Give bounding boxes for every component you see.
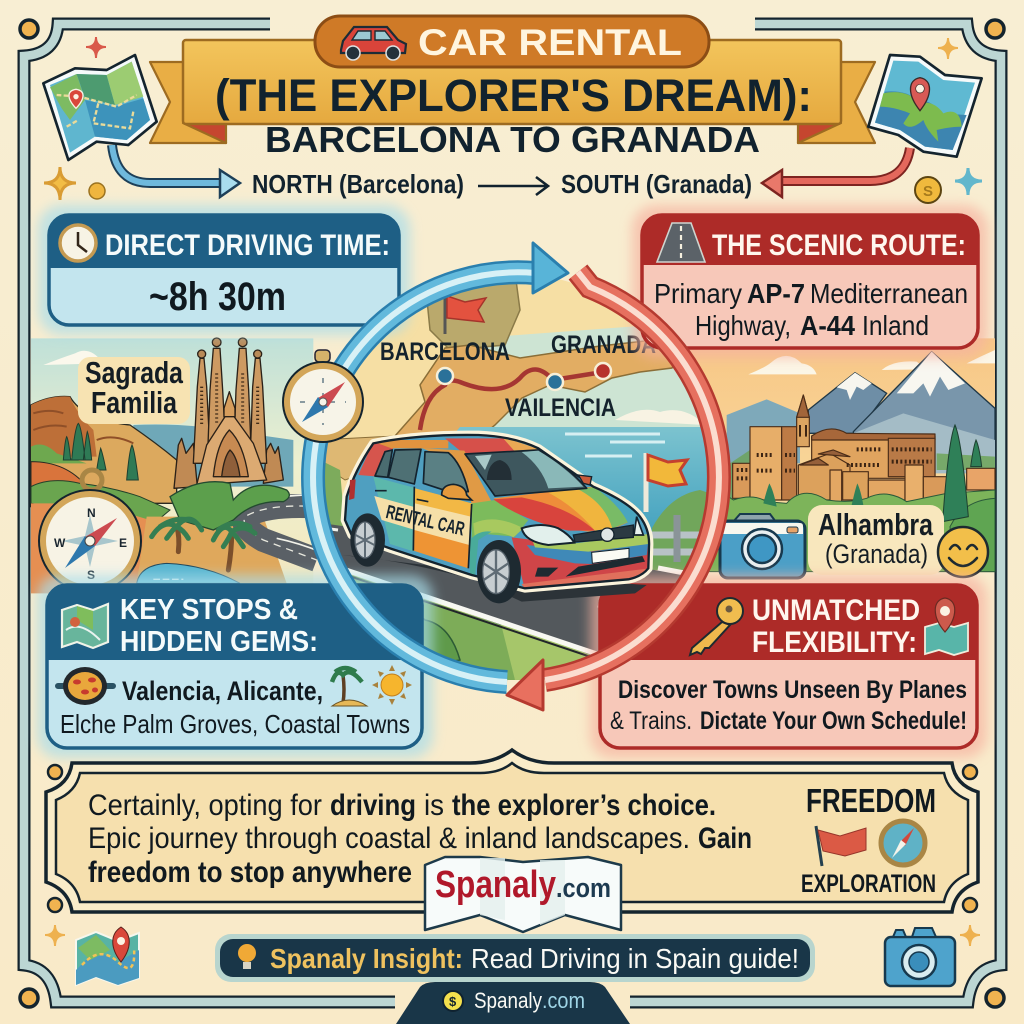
icon: large compass: W: [54, 536, 66, 550]
freedom label: FREEDOM: [806, 782, 936, 819]
icon: bottom right camera: [885, 928, 955, 986]
icon: palm island: [332, 668, 367, 706]
exploration label: EXPLORATION: [801, 870, 936, 898]
panel: unmatched flexibility: [590, 575, 987, 758]
icon: compass: [881, 821, 925, 865]
summary text: the explorer’s choice.: [452, 789, 716, 822]
icon: red car: [341, 27, 406, 60]
label: Sagrada Familia: Sagrada: [85, 355, 184, 390]
panel header: [600, 585, 977, 660]
icon: open book logo: [425, 857, 621, 932]
body text: AP-7: [747, 278, 805, 309]
insight text: Spanaly Insight:: [270, 943, 463, 974]
rental car lettering: RENTAL CAR: [384, 502, 467, 541]
icon: left map: [43, 55, 157, 160]
body text: Valencia, Alicante,: [122, 676, 323, 706]
driving time value: ~8h 30m: [149, 275, 286, 319]
mirrors: [442, 484, 472, 500]
arrow: north blue connector: [112, 145, 240, 197]
license plate: [592, 548, 629, 563]
icon: sun: [372, 665, 412, 705]
heading: [120, 594, 318, 658]
summary text: [88, 789, 752, 889]
headlights: [522, 525, 574, 545]
body text: Inland: [862, 310, 929, 341]
label: Sagrada Familia: [78, 355, 190, 424]
map labels: VAILENCIA: [505, 394, 616, 422]
icon: Spanish flag: [646, 453, 687, 512]
route map line with stops: [420, 363, 611, 430]
icon: key: [690, 598, 743, 655]
icon: dollar bulb: $: [449, 994, 457, 1009]
panel header: [642, 215, 978, 265]
door handles and lines: [375, 487, 472, 568]
direction labels: [252, 169, 752, 199]
footer brand: Spanaly: [474, 988, 542, 1013]
map labels: GRANADA: [551, 331, 656, 359]
decorative sparkles and coins: S: [923, 183, 933, 200]
icon: large compass: [38, 470, 142, 593]
direction labels: SOUTH (Granada): [561, 169, 752, 199]
icon: open book logo: .com: [556, 873, 611, 903]
road curve: [244, 506, 320, 560]
arrow: blue clockwise arc: [313, 243, 568, 682]
body text: [654, 278, 968, 341]
banner ribbon tails: [150, 62, 875, 143]
panel: key stops and hidden gems: [37, 575, 433, 758]
car body paint: [342, 433, 655, 593]
heading: HIDDEN GEMS:: [120, 626, 318, 658]
icon: open book logo: Spanaly: [435, 864, 556, 906]
icon: flag: [816, 826, 866, 866]
footer tab: [396, 982, 630, 1024]
rear wheel: [350, 513, 385, 567]
icon: road: [657, 223, 705, 262]
icon: large compass: N: [87, 506, 96, 520]
callout: spanaly insight: [215, 934, 815, 982]
body text: Primary: [654, 278, 742, 309]
front wheel: [477, 540, 521, 603]
icon: clock: [60, 225, 96, 261]
summary text: driving: [330, 789, 416, 822]
icon: dollar bulb: [443, 991, 463, 1011]
arrow: south red connector: [762, 148, 910, 197]
icon: small compass: [282, 350, 364, 443]
pill heading: CAR RENTAL: [418, 22, 682, 63]
Alhambra buildings: [733, 395, 995, 503]
summary text: freedom to stop anywhere: [88, 856, 412, 889]
panel: bottom summary: [46, 750, 978, 912]
subtitle: BARCELONA TO GRANADA: [265, 119, 760, 160]
icon: folded map: [62, 604, 108, 648]
direction labels: NORTH (Barcelona): [252, 169, 464, 199]
greenery: [690, 490, 995, 572]
panel: direct driving time: [38, 205, 410, 335]
summary text: is: [424, 789, 444, 822]
body text: Elche Palm Groves, Coastal Towns: [60, 709, 410, 739]
label: Alhambra (Granada): [808, 505, 944, 575]
grille and badge: [573, 525, 633, 542]
heading: UNMATCHED: [752, 594, 920, 627]
icon: paella: [58, 667, 113, 705]
icon: right map: [868, 55, 982, 157]
body text: & Trains.: [610, 707, 692, 735]
label: Alhambra (Granada): (Granada): [825, 539, 928, 569]
title pill: car rental: [315, 16, 709, 67]
banner main: [183, 40, 841, 124]
arrow: red clockwise arc: [507, 272, 719, 710]
body text: Dictate Your Own Schedule!: [700, 707, 967, 735]
heading: DIRECT DRIVING TIME:: [105, 229, 390, 262]
icon: large compass: E: [119, 536, 127, 550]
body text: [610, 676, 967, 735]
map labels: [380, 331, 656, 422]
summary text: Certainly, opting for: [88, 789, 322, 822]
right landscape with Alhambra: [690, 338, 995, 572]
label: Alhambra (Granada): Alhambra: [818, 507, 934, 542]
map labels: BARCELONA: [380, 338, 510, 366]
foreground bushes: [170, 482, 289, 530]
central journey circle scene: [325, 280, 707, 680]
panel header: [47, 585, 422, 660]
Sagrada Familia: [174, 338, 283, 488]
car outline: [345, 435, 649, 588]
body text: [60, 676, 410, 739]
car shadow: [342, 555, 647, 602]
illustration: rental car: [342, 433, 655, 603]
summary text: Epic journey through coastal & inland landscapes.: [88, 822, 690, 855]
body text: A-44: [800, 310, 855, 341]
body text: Mediterranean: [810, 278, 968, 309]
footer brand: .com: [542, 988, 585, 1013]
icon: camera: [720, 514, 805, 578]
lower grille: [566, 556, 645, 577]
icon: lightbulb: [238, 944, 256, 969]
icon: large compass: S: [87, 568, 95, 582]
heading: [752, 594, 920, 659]
panel header: [49, 215, 399, 268]
panel: the scenic route: [632, 205, 988, 358]
summary text: Gain: [698, 822, 752, 855]
panel ornaments: [48, 765, 977, 912]
heading: KEY STOPS &: [120, 594, 298, 626]
windows: [375, 449, 587, 496]
insight text: Read Driving in Spain guide!: [471, 943, 799, 974]
left landscape with Sagrada Familia: [31, 338, 320, 593]
insight text: [270, 943, 799, 974]
body text: Highway,: [695, 310, 791, 341]
body text: Discover Towns Unseen By Planes: [618, 676, 967, 704]
palm trees: [152, 519, 255, 570]
icon: red flag on map: [445, 295, 486, 334]
title: (THE EXPLORER'S DREAM):: [215, 70, 812, 121]
icon: smiley: [938, 527, 988, 577]
car halo: [345, 435, 649, 588]
heading: FLEXIBILITY:: [752, 626, 917, 659]
icon: pin and map: [925, 598, 968, 655]
icon: bottom left map: [76, 927, 139, 985]
heading: THE SCENIC ROUTE:: [712, 229, 966, 262]
label: Sagrada Familia: Familia: [91, 385, 178, 420]
